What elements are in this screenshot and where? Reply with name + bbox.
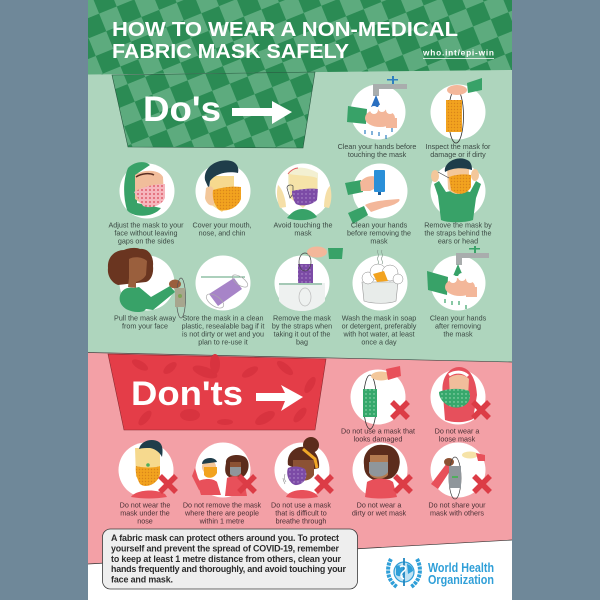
caption: Do not wear the [120, 500, 170, 510]
caption [272, 314, 332, 346]
caption: is not dirty or wet and you [182, 330, 264, 338]
caption: Store the mask in a clean [182, 314, 264, 322]
caption: Avoid touching the [273, 220, 333, 230]
caption: mask [370, 236, 388, 246]
caption: Cover your mouth, [192, 220, 252, 230]
caption: by the straps when [272, 322, 332, 330]
icon: mask under the nose [118, 440, 174, 498]
icon: dirty or wet mask [352, 442, 408, 498]
icon: loose mask [430, 367, 486, 424]
caption: the straps behind the [424, 228, 492, 238]
caption: before removing the [347, 228, 411, 238]
caption: with hot water, at least [342, 330, 415, 338]
caption [192, 220, 252, 238]
caption: the mask [443, 330, 473, 338]
caption: Do not use a mask that [341, 426, 415, 436]
icon: remove the mask from the bag [274, 246, 343, 311]
caption [271, 500, 331, 526]
icon: wash the mask in soap [352, 250, 408, 310]
icon: sharing a mask [430, 442, 486, 499]
caption: mask [294, 228, 312, 238]
icon: damaged mask [350, 366, 406, 429]
caption: Do not wear a [435, 426, 479, 436]
caption: once a day [361, 338, 397, 346]
icon: mask difficult to breathe [274, 437, 330, 498]
caption: where there are people [184, 508, 259, 518]
caption [114, 314, 176, 330]
caption [347, 220, 411, 246]
caption: Wash the mask in soap [342, 314, 416, 322]
caption: bag [296, 338, 308, 346]
caption [428, 500, 486, 518]
website link: who.int/epi-win [422, 48, 494, 58]
icon: red cross [473, 402, 489, 418]
panel: Don'ts banner [108, 354, 326, 430]
caption [424, 220, 492, 246]
icon: removing mask near people [192, 442, 250, 498]
logo text: World Health Organization: World Health [428, 561, 494, 575]
caption: taking it out of the [274, 330, 330, 338]
callout: A fabric mask can protect others around you. To protect [111, 533, 339, 543]
caption [120, 500, 170, 526]
caption: touching the mask [348, 150, 407, 159]
caption [338, 142, 416, 159]
caption: Do not share your [428, 500, 486, 510]
caption [182, 314, 264, 346]
heading: Do's: Do's [143, 90, 221, 129]
caption [426, 142, 491, 159]
icon: store mask in plastic bag [196, 256, 250, 311]
icon: red cross [239, 476, 255, 492]
icon: man covering mouth, nose, chin [196, 160, 250, 218]
caption: Clean your hands [430, 314, 487, 322]
caption: that is difficult to [275, 508, 327, 518]
callout: hands frequently and thoroughly, and avoid touching your [111, 564, 347, 574]
caption: mask under the [120, 508, 170, 518]
caption: nose, and chin [199, 228, 245, 238]
callout [102, 529, 358, 589]
caption [273, 220, 333, 238]
caption: looks damaged [354, 434, 402, 444]
poster page [88, 0, 512, 600]
logo text: World Health Organization [428, 561, 494, 587]
title line 2: FABRIC MASK SAFELY [112, 40, 349, 63]
caption: nose [137, 516, 153, 526]
caption: Pull the mask away [114, 314, 176, 322]
caption: Do not remove the mask [183, 500, 262, 510]
caption: gaps on the sides [118, 236, 175, 246]
icon: red cross [474, 476, 490, 492]
heading: Don'ts: Don'ts [131, 375, 243, 413]
caption: face without leaving [114, 228, 178, 238]
icon: red cross [395, 476, 411, 492]
caption: loose mask [439, 434, 476, 444]
caption: within 1 metre [199, 516, 244, 526]
caption [341, 426, 415, 444]
icon: inspect the mask [430, 78, 486, 143]
icon: pull the mask away [108, 248, 186, 318]
logo text: World Health Organization: Organization [428, 573, 494, 587]
caption: Clean your hands [351, 220, 408, 230]
caption: plan to re-use it [198, 338, 248, 346]
title: HOW TO WEAR A NON-MEDICAL [112, 18, 458, 41]
caption: mask with others [430, 508, 484, 518]
caption: plastic, resealable bag if it [182, 322, 264, 330]
caption [352, 500, 407, 518]
icon: clean hands after removing [427, 246, 489, 310]
icon: red cross [316, 476, 332, 492]
icon: red cross [392, 402, 408, 418]
caption: ears or head [438, 236, 478, 246]
icon: woman in hijab adjusting mask [120, 162, 174, 218]
caption: Remove the mask [273, 314, 331, 322]
caption: Inspect the mask for [426, 142, 491, 151]
callout: face and mask. [111, 574, 173, 584]
panel: Do's banner [112, 72, 315, 148]
icon: red cross [160, 476, 176, 492]
icon: clean hands before touching [347, 76, 407, 140]
icon: remove the mask by the straps [430, 158, 486, 222]
caption [108, 220, 184, 246]
icon: avoid touching the mask [276, 164, 331, 220]
caption: damage or if dirty [430, 150, 486, 159]
callout: yourself and prevent the spread of COVID-19, remember [111, 544, 340, 554]
caption [435, 426, 479, 444]
caption [430, 314, 487, 338]
icon: WHO emblem [388, 558, 420, 587]
caption: Do not wear a [357, 500, 401, 510]
caption: Adjust the mask to your [108, 220, 184, 230]
arrow: Don'ts [256, 385, 303, 411]
header band [88, 0, 512, 74]
caption: Do not use a mask [271, 500, 331, 510]
caption: from your face [122, 322, 168, 330]
icon: sanitizer hands [345, 164, 408, 224]
caption [183, 500, 262, 526]
arrow: Do's [232, 101, 292, 124]
caption [342, 314, 417, 346]
caption: Clean your hands before [338, 142, 416, 151]
caption: dirty or wet mask [352, 508, 407, 518]
callout: to keep at least 1 metre distance from others, clean your [111, 554, 342, 564]
caption: after removing [435, 322, 481, 330]
caption: Remove the mask by [424, 220, 492, 230]
caption: breathe through [276, 516, 326, 526]
caption: or detergent, preferably [342, 322, 417, 330]
